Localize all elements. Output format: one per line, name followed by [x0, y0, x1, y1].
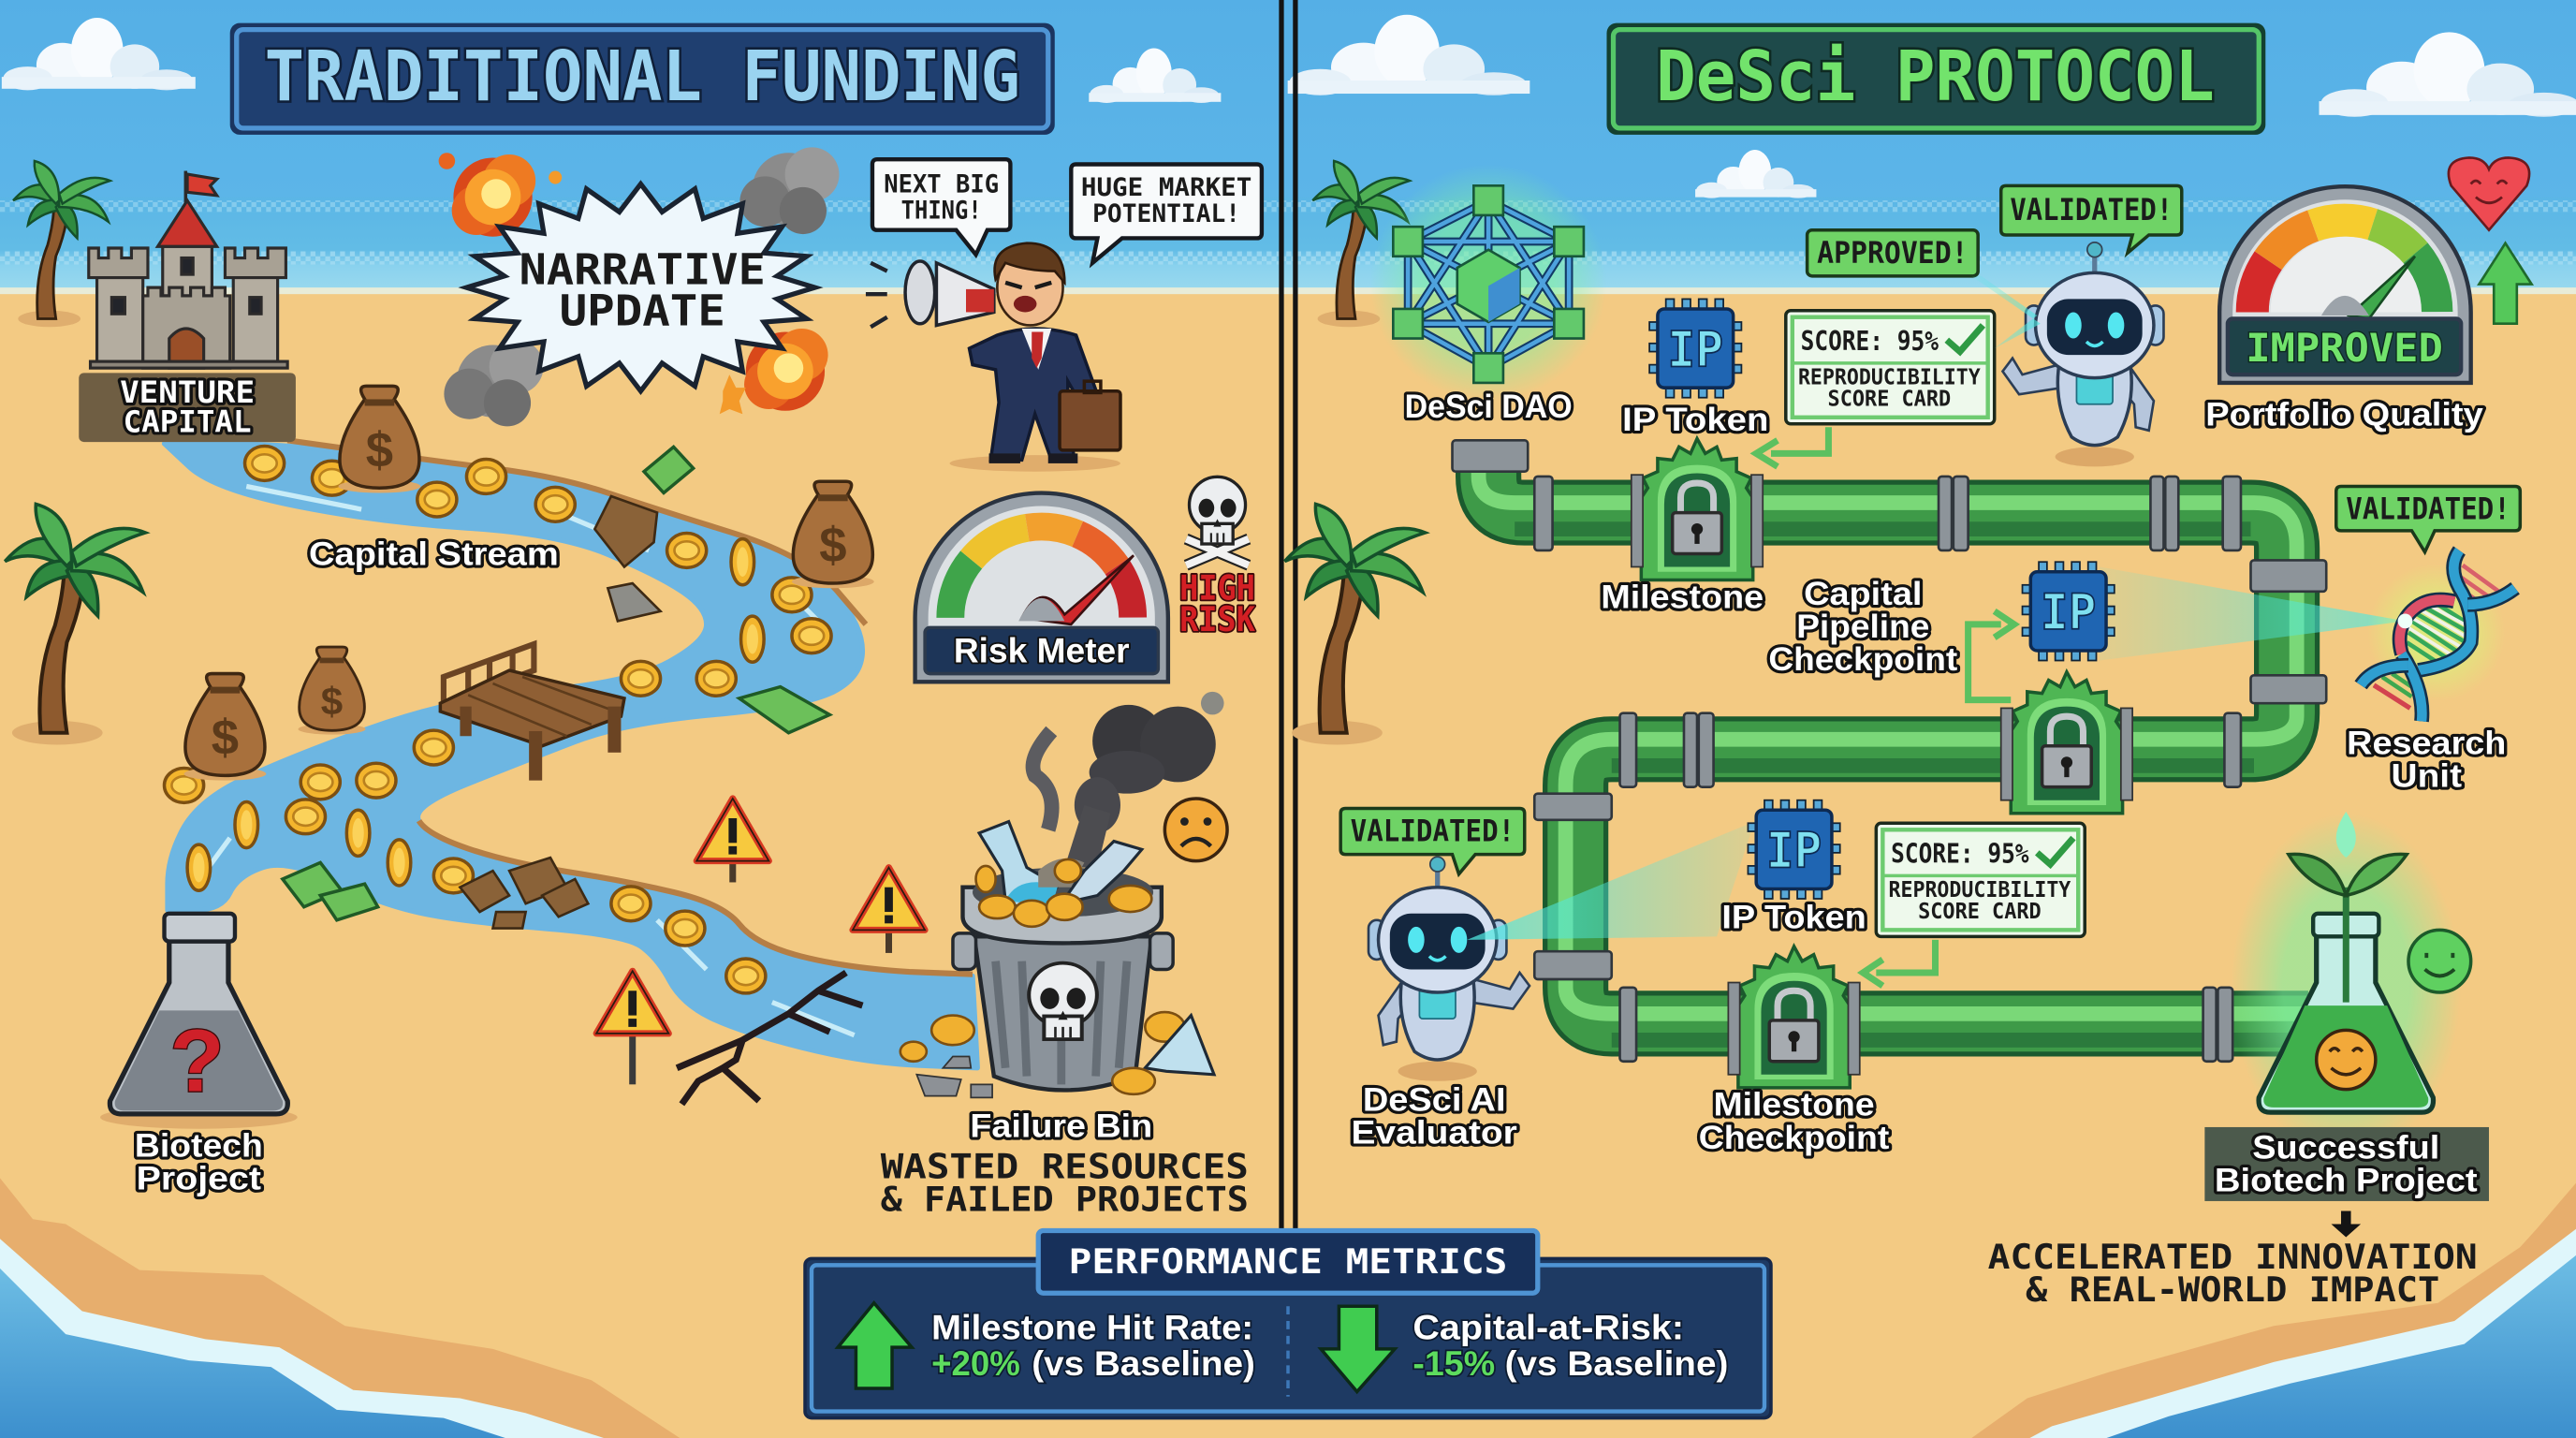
- label: biotech project: Biotech: [135, 1128, 263, 1165]
- high risk label: RISK: [1179, 599, 1256, 639]
- money bags: $: [212, 711, 239, 766]
- badge: approved: [1808, 230, 1978, 276]
- panel: performance metrics: [805, 1231, 1771, 1418]
- high risk label: HIGH: [1179, 568, 1255, 609]
- label: successful biotech project: [2204, 1127, 2489, 1201]
- clouds: [2, 15, 2576, 198]
- metric: milestone hit rate: Milestone Hit Rate:: [931, 1308, 1253, 1346]
- arrow: checkpoint to ip token: [1969, 611, 2014, 700]
- arrow up green: [2479, 243, 2532, 324]
- arrow down black: [2331, 1211, 2361, 1238]
- portfolio quality gauge: [2219, 186, 2471, 383]
- label: desci ai evaluator: Evaluator: [1352, 1114, 1517, 1151]
- scan beam dna: [2100, 566, 2405, 661]
- metric arrow down: [1321, 1306, 1395, 1392]
- successful biotech flask: [2231, 812, 2461, 1158]
- ip token chip middle: IP: [2041, 584, 2097, 641]
- metric arrow up: [838, 1303, 912, 1388]
- score card top: REPRODUCIBILITY: [1798, 366, 1981, 390]
- background: sea: [0, 198, 2576, 296]
- label: biotech project: Project: [137, 1161, 261, 1197]
- metrics header tab: [1038, 1231, 1538, 1293]
- narrative update burst: UPDATE: [560, 286, 725, 335]
- heart icon: [2449, 157, 2529, 230]
- crumbled bank rocks: [460, 496, 661, 929]
- capital stream river: [165, 440, 977, 1068]
- speech bubble: huge market potential: HUGE MARKET: [1081, 174, 1251, 202]
- arrow: score card to milestone: [1756, 427, 1828, 466]
- label: research unit: [2347, 726, 2506, 795]
- caption: accelerated innovation: ACCELERATED INNOVATION: [1988, 1237, 2478, 1277]
- narrative update burst: [466, 184, 815, 391]
- pipe flanges: [1453, 440, 2326, 1062]
- caption: wasted resources: WASTED RESOURCES: [881, 1146, 1249, 1186]
- label: ip token lower: IP Token: [1721, 900, 1866, 936]
- milestone gates: [1632, 439, 2132, 1088]
- metrics header tab: PERFORMANCE METRICS: [1069, 1241, 1507, 1282]
- label: desci ai evaluator: DeSci AI: [1363, 1081, 1506, 1118]
- smoke from failure bin: [1033, 692, 1224, 868]
- label: milestone: Milestone: [1601, 579, 1764, 615]
- crack in ground: [677, 973, 862, 1104]
- money bags: $: [321, 679, 343, 723]
- score card top: SCORE CARD: [1828, 387, 1951, 411]
- scan beam top: [1971, 276, 2041, 348]
- label: ip token top: IP Token: [1622, 402, 1768, 438]
- background: sky: [0, 0, 2576, 200]
- speech bubble: huge market potential: [1071, 165, 1262, 263]
- speech bubble: huge market potential: POTENTIAL!: [1092, 200, 1240, 228]
- title: traditional funding: TRADITIONAL FUNDING: [265, 37, 1020, 117]
- label: venture capital: [79, 373, 296, 442]
- failure bin trash can: [953, 822, 1173, 1090]
- badge: validated research: [2336, 486, 2520, 552]
- metric: milestone hit rate: [931, 1308, 1255, 1383]
- biotech project flask: [100, 914, 298, 1129]
- dna research unit: [2361, 550, 2515, 721]
- label: capital pipeline checkpoint: [1768, 576, 1958, 678]
- label: biotech project: [135, 1128, 263, 1197]
- warning signs: [596, 799, 925, 1084]
- metric: capital at risk: Capital-at-Risk:: [1412, 1308, 1684, 1346]
- speech bubble: next big thing: [872, 159, 1010, 255]
- explosions and smoke: [439, 147, 840, 426]
- bridge: [440, 644, 624, 781]
- label: venture capital: CAPITAL: [124, 406, 252, 440]
- metric: capital at risk: -15%: [1412, 1344, 1495, 1383]
- robot evaluator top: [2002, 242, 2163, 466]
- label: capital stream: Capital Stream: [309, 536, 559, 573]
- coins in stream: [165, 446, 831, 993]
- metric: milestone hit rate: (vs Baseline): [1032, 1344, 1255, 1383]
- skull and crossbones: [1186, 477, 1249, 565]
- ip token chip lower: [1748, 800, 1840, 899]
- label: capital pipeline checkpoint: Capital: [1804, 576, 1922, 612]
- high risk label: [1179, 568, 1256, 639]
- badge: validated research: VALIDATED!: [2346, 493, 2510, 527]
- metric: capital at risk: (vs Baseline): [1505, 1344, 1728, 1383]
- portfolio quality gauge: IMPROVED: [2246, 325, 2443, 371]
- businessman with megaphone: [866, 243, 1120, 472]
- label: milestone checkpoint: Checkpoint: [1699, 1120, 1890, 1156]
- cash bundles: [283, 447, 829, 920]
- ip token chip lower: IP: [1766, 823, 1822, 880]
- badge: validated top: [2001, 185, 2182, 253]
- panel dividers: [1279, 0, 1298, 1232]
- caption: accelerated innovation: & REAL-WORLD IMPACT: [2026, 1269, 2439, 1310]
- risk meter gauge: Risk Meter: [954, 631, 1130, 669]
- title: desci protocol: [1606, 23, 2265, 135]
- background: sand: [0, 294, 2576, 1438]
- risk meter gauge: [915, 493, 1168, 682]
- speech bubble: next big thing: NEXT BIG: [884, 170, 999, 198]
- sad face: [1164, 799, 1227, 861]
- score card top: SCORE: 95%: [1801, 326, 1939, 357]
- ip token chip top: IP: [1667, 321, 1723, 378]
- money bags: [184, 386, 874, 781]
- caption: wasted resources: [881, 1146, 1249, 1219]
- label: research unit: Unit: [2392, 758, 2462, 795]
- money bags: $: [819, 518, 846, 573]
- caption: wasted resources: & FAILED PROJECTS: [881, 1179, 1249, 1219]
- label: failure bin: Failure Bin: [970, 1108, 1152, 1144]
- badge: validated top: VALIDATED!: [2010, 194, 2173, 227]
- badge: validated lower: [1340, 808, 1525, 874]
- label: venture capital: VENTURE: [120, 376, 255, 410]
- shoreline left: [0, 1178, 681, 1438]
- label: research unit: Research: [2347, 726, 2506, 762]
- metric: capital at risk: [1412, 1308, 1728, 1383]
- arrow: score card to milestone lower: [1863, 940, 1936, 986]
- title: desci protocol: DeSci PROTOCOL: [1656, 37, 2215, 117]
- narrative update burst: NARRATIVE: [520, 245, 766, 295]
- metric: milestone hit rate: +20%: [931, 1344, 1020, 1383]
- biotech project flask: ?: [170, 1011, 225, 1110]
- badge: validated lower: VALIDATED!: [1351, 815, 1515, 849]
- desci dao network icon: [1370, 165, 1606, 401]
- badge: approved: APPROVED!: [1817, 237, 1969, 271]
- scan beam lower: [1467, 822, 1754, 940]
- label: capital pipeline checkpoint: Checkpoint: [1768, 641, 1958, 678]
- money bags: $: [366, 422, 393, 477]
- score card lower: REPRODUCIBILITY: [1888, 878, 2071, 902]
- debris around bin: [900, 1012, 1214, 1097]
- label: desci dao: DeSci DAO: [1405, 389, 1573, 425]
- label: capital pipeline checkpoint: Pipeline: [1796, 609, 1929, 645]
- robot evaluator lower: [1368, 857, 1530, 1081]
- capital pipeline: [1479, 440, 2308, 1040]
- shoreline right: [1969, 1183, 2576, 1438]
- label: successful biotech project: Successful: [2252, 1129, 2439, 1166]
- speech bubble: next big thing: THING!: [901, 197, 982, 225]
- score card top: [1786, 311, 1995, 424]
- palm trees: [5, 161, 1426, 744]
- score card lower: [1876, 823, 2085, 936]
- ip token chip top: [1649, 299, 1741, 398]
- label: desci ai evaluator: [1352, 1081, 1517, 1151]
- label: successful biotech project: Biotech Project: [2215, 1162, 2478, 1198]
- title: traditional funding: [230, 23, 1055, 135]
- score card lower: SCORE CARD: [1918, 900, 2042, 924]
- label: portfolio quality: Portfolio Quality: [2205, 397, 2483, 433]
- label: milestone checkpoint: Milestone: [1714, 1087, 1875, 1123]
- ip token chip middle: [2023, 562, 2115, 661]
- smiling face green: [2408, 930, 2471, 992]
- castle: venture capital: [89, 171, 287, 368]
- label: milestone checkpoint: [1699, 1087, 1890, 1156]
- score card lower: SCORE: 95%: [1891, 838, 2029, 869]
- caption: accelerated innovation: [1988, 1237, 2478, 1310]
